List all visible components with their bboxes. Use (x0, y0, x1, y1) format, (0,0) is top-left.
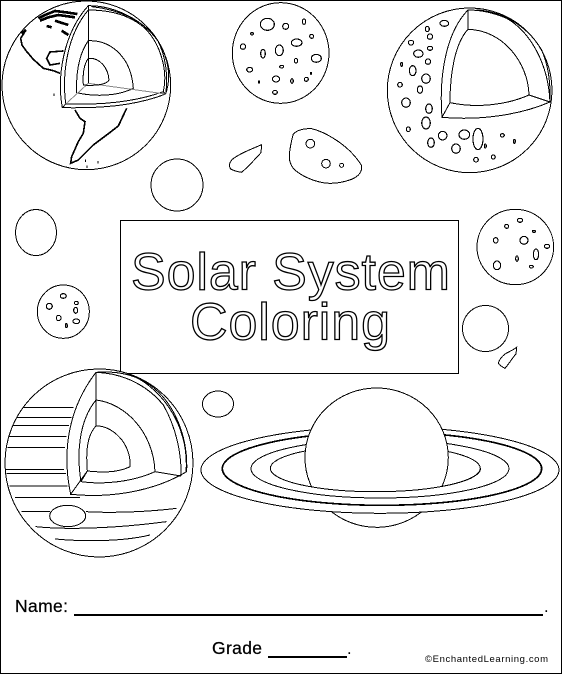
planet: Saturn with rings (201, 388, 559, 527)
label: Grade: Grade (212, 638, 262, 658)
wedge cutaway (60, 6, 169, 108)
plain moon right (462, 306, 508, 352)
craters (398, 20, 515, 162)
asteroid: large (289, 129, 362, 183)
grade line (268, 656, 347, 658)
title box (120, 220, 458, 374)
small moon center (202, 391, 234, 417)
rings behind (201, 427, 559, 513)
asteroid: fragment right (498, 347, 517, 368)
small cratered moon left (37, 285, 89, 338)
bands (6, 407, 177, 541)
wedge (67, 372, 187, 495)
planet body (305, 388, 448, 527)
planet: banded cutaway bottom left (5, 369, 193, 557)
grade field (212, 638, 352, 658)
title: Solar System: Solar System (131, 244, 450, 302)
planet: Earth cutaway (2, 1, 171, 170)
title: Coloring: Coloring (190, 294, 390, 352)
plain oval moon left (16, 210, 56, 256)
name line (74, 614, 543, 616)
rings in front (201, 468, 559, 513)
grade period: . (347, 640, 352, 658)
cratered moon right (477, 209, 554, 285)
copyright: ©EnchantedLearning.com (425, 654, 548, 665)
period: . (544, 598, 549, 616)
craters (240, 18, 321, 94)
asteroid: small (230, 145, 262, 172)
planet: rocky cutaway top right (387, 8, 552, 173)
moon: large cratered (232, 3, 329, 103)
icon: continents (21, 11, 127, 167)
small plain moon near top (151, 159, 203, 211)
label: Name: Name: (15, 596, 68, 616)
name field (15, 596, 549, 616)
storm oval (50, 505, 86, 527)
